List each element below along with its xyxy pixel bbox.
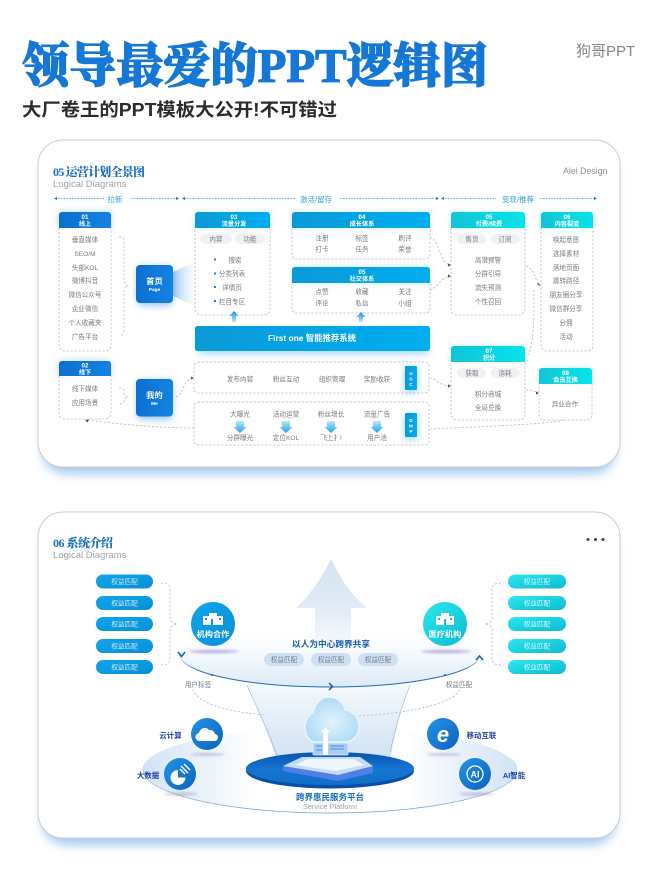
card 06 content: 选择素材 xyxy=(553,249,580,258)
panel heading xyxy=(53,164,145,190)
upper orbit ellipse xyxy=(178,623,483,690)
DMP row: 飞上扌! xyxy=(320,433,342,442)
medical circle xyxy=(421,602,471,653)
stage arrows row: 激活/留存 xyxy=(300,194,333,204)
panel heading: Logical Diagrams xyxy=(53,179,127,190)
card 01 online: 头部KOL xyxy=(72,263,99,272)
card 05 social: 05 xyxy=(359,269,366,276)
DMP row: 大曝光 xyxy=(230,410,250,418)
DMP row xyxy=(194,402,429,445)
connector beams xyxy=(173,262,195,306)
card 05 social: 关注 xyxy=(398,287,412,296)
card 07 points: 积分商城 xyxy=(475,390,502,398)
card 05 social: 评论 xyxy=(315,298,329,308)
stage arrows row: 拉新 xyxy=(108,194,123,204)
more dots xyxy=(586,538,604,541)
card 01 online: 01 xyxy=(82,214,89,221)
shared pills: 权益匹配 xyxy=(318,655,345,664)
arrow up into card 04 xyxy=(356,312,366,322)
right pill list: 权益匹配 xyxy=(524,620,551,628)
node: cloud computing xyxy=(159,718,225,756)
institution circle xyxy=(189,602,239,653)
UGC row: C xyxy=(409,382,413,387)
node: big data: 大数据 xyxy=(137,771,160,780)
DMP row: D xyxy=(409,418,413,423)
DMP row: M xyxy=(409,424,413,428)
shared pills: 权益匹配 xyxy=(271,655,298,664)
node: AI xyxy=(459,758,526,795)
DMP row: 分群曝光 xyxy=(227,433,254,442)
icon: cloud xyxy=(305,697,359,742)
card 05 social: 收藏 xyxy=(355,287,369,296)
node: cloud computing: 云计算 xyxy=(159,731,182,740)
platform label: 跨界惠民服务平台 xyxy=(296,792,364,802)
institution circle: 机构合作 xyxy=(197,629,229,639)
card 08 member: 会员互换 xyxy=(553,376,579,384)
card 01 online: SEO/M xyxy=(74,251,96,258)
panel: system introduction xyxy=(38,512,620,845)
left bracket xyxy=(161,583,177,665)
node: me: 我的 xyxy=(146,390,163,400)
card 06 content: 落地页面 xyxy=(553,263,580,272)
UGC row: U xyxy=(409,371,413,376)
node: mobile internet: 移动互联 xyxy=(467,731,497,740)
card 07 points: 消耗 xyxy=(498,368,512,378)
card paid renewal: 付费/续费 xyxy=(476,220,502,228)
card 01 online: 个人收藏夹 xyxy=(69,318,102,327)
right pill list: 权益匹配 xyxy=(524,642,551,650)
stage arrows row: 变现/推荐 xyxy=(502,194,535,204)
node: AI: AI智能 xyxy=(503,771,526,780)
card 07 points: 积分 xyxy=(483,354,496,362)
card 05 social: 私信 xyxy=(355,298,369,308)
panel heading: 06 系统介绍 xyxy=(53,535,113,550)
card 03 traffic: 搜索 xyxy=(228,256,242,264)
card 06 content: 分佣 xyxy=(559,318,573,327)
card 01 online: 广告平台 xyxy=(72,332,99,341)
card 07 points: 07 xyxy=(486,348,493,355)
card 03 traffic xyxy=(195,212,270,315)
panel heading: Logical Diagrams xyxy=(53,550,127,561)
panel: operations plan xyxy=(38,140,620,474)
DMP row: P xyxy=(409,429,413,434)
card 08 member: 异业合作 xyxy=(552,400,579,408)
side labels xyxy=(185,680,473,689)
left pill list xyxy=(96,574,153,674)
title: 领导最爱的PPT逻辑图 xyxy=(22,40,488,93)
icon: hospital xyxy=(436,613,454,625)
UGC row xyxy=(194,362,429,393)
card paid renewal: 个性召回 xyxy=(475,297,502,306)
card 07 points: 获取 xyxy=(465,368,479,378)
card 01 online: 微博抖音 xyxy=(72,276,99,285)
node: home page: 首页 xyxy=(146,276,163,286)
node: mobile internet: e xyxy=(437,722,449,747)
big upward arrow xyxy=(296,559,367,670)
funnel xyxy=(247,680,410,760)
card 05 social: 点赞 xyxy=(315,287,329,296)
stage arrows row xyxy=(54,194,597,204)
icon: upload arrow xyxy=(320,727,330,755)
author tag: 狗哥PPT xyxy=(576,43,635,60)
card 02 offline: 02 xyxy=(82,362,89,370)
platform label xyxy=(296,792,364,811)
card 06 content: 06 xyxy=(564,214,571,221)
brackets and connectors xyxy=(85,237,566,429)
card 06 content: 跳转路径 xyxy=(553,276,580,285)
left pill list: 权益匹配 xyxy=(111,598,138,608)
arrow up into card 03 xyxy=(230,311,238,322)
platform block and server xyxy=(283,743,373,781)
right pill list xyxy=(508,574,566,674)
medical circle: 医疗机构 xyxy=(429,629,461,639)
side labels: 用户标签 xyxy=(185,680,212,689)
recommendation system bar: First one 智能推荐系统 xyxy=(268,333,357,343)
card 02 offline: 线下媒体 xyxy=(72,384,99,393)
card 01 online: 垂直媒体 xyxy=(72,235,99,244)
card 05 social: 小组 xyxy=(398,298,412,308)
card 04 growth: 刷评 xyxy=(398,234,412,242)
card 03 traffic: 内容 xyxy=(209,234,223,244)
card 07 points: 全局兑换 xyxy=(475,403,502,412)
card 03 traffic: 流量分发 xyxy=(222,220,247,228)
card 06 content: 微信群分享 xyxy=(550,304,583,313)
card 03 traffic: 详情页 xyxy=(222,283,242,292)
card 08 member xyxy=(539,368,592,420)
side labels: 权益匹配 xyxy=(446,680,473,689)
card 06 content: 朋友圈分享 xyxy=(550,290,583,299)
card 04 growth: 注册 xyxy=(315,234,329,242)
right pill list: 权益匹配 xyxy=(524,577,551,586)
shared heading: 以人为中心跨界共享 xyxy=(292,638,370,649)
card 06 content xyxy=(541,212,593,351)
platform base xyxy=(246,752,414,788)
card 01 online: 微信公众号 xyxy=(69,290,102,299)
DMP row: 定位KOL xyxy=(273,433,300,442)
shared pills xyxy=(264,653,398,666)
card 03 traffic: 功能 xyxy=(243,234,257,244)
card 05 social: 社交体系 xyxy=(350,275,374,283)
UGC row: 奖励收获 xyxy=(364,374,391,384)
node: me: Me xyxy=(151,401,158,407)
card 04 growth xyxy=(292,212,430,259)
panel heading: 05 运营计划全景图 xyxy=(53,164,145,179)
brand note: Alei Design xyxy=(563,166,608,176)
left pill list: 权益匹配 xyxy=(111,620,138,628)
node: home page xyxy=(136,265,173,305)
card paid renewal: 05 xyxy=(486,214,493,221)
node: mobile internet xyxy=(427,718,497,756)
card 03 traffic: 分类列表 xyxy=(219,269,246,278)
card paid renewal: 流失预测 xyxy=(475,283,502,292)
card 04 growth: 04 xyxy=(359,214,366,221)
card paid renewal: 高潜预警 xyxy=(475,256,502,264)
UGC row: 粉丝互动 xyxy=(273,374,300,384)
right pill list: 权益匹配 xyxy=(524,598,551,608)
card 07 points xyxy=(451,346,525,420)
dashed lower arc xyxy=(193,689,460,716)
card 02 offline xyxy=(59,361,111,419)
funnel edges xyxy=(247,685,410,755)
card 01 online: 企业微信 xyxy=(72,304,99,313)
DMP row: 流量广告 xyxy=(364,410,391,418)
card 04 growth: 打卡 xyxy=(315,244,329,254)
lower orbit ellipse xyxy=(143,727,517,813)
right pill list: 权益匹配 xyxy=(524,662,551,672)
card paid renewal: 订阅 xyxy=(498,236,512,244)
UGC row: 组织管理 xyxy=(319,374,346,384)
card 04 growth: 荣誉 xyxy=(398,244,412,254)
card 01 online: 线上 xyxy=(79,220,91,228)
card 02 offline: 应用场景 xyxy=(72,398,99,407)
card 04 growth: 成长体系 xyxy=(350,220,374,228)
card 06 content: 内容裂变 xyxy=(555,220,579,228)
platform label: Service Platform xyxy=(303,802,357,811)
node: home page: Page xyxy=(149,287,161,293)
card 06 content: 唤起意愿 xyxy=(553,235,580,244)
card 03 traffic: 栏目专区 xyxy=(219,297,246,306)
card paid renewal: 分群引导 xyxy=(475,269,502,278)
DMP row: 粉丝增长 xyxy=(318,410,345,418)
right bracket xyxy=(485,583,501,665)
left pill list: 权益匹配 xyxy=(111,642,138,650)
recommendation system bar xyxy=(195,326,430,354)
card 06 content: 活动 xyxy=(559,332,573,341)
card 02 offline: 线下 xyxy=(79,368,91,376)
panel heading xyxy=(53,535,127,561)
subtitle: 大厂卷王的PPT模板大公开!不可错过 xyxy=(22,100,337,120)
card paid renewal: 售货 xyxy=(465,234,479,244)
UGC row: G xyxy=(409,376,413,382)
card 01 online xyxy=(59,212,111,351)
card 08 member: 08 xyxy=(562,370,569,377)
UGC row: 发布内容 xyxy=(227,374,254,384)
card paid renewal xyxy=(451,212,525,315)
card 05 social xyxy=(292,267,430,313)
node: big data xyxy=(137,758,198,795)
left pill list: 权益匹配 xyxy=(111,577,138,586)
card 03 traffic: 03 xyxy=(231,214,238,221)
DMP row: 用户池 xyxy=(367,433,387,442)
left pill list: 权益匹配 xyxy=(111,662,138,672)
shared pills: 权益匹配 xyxy=(365,655,392,664)
node: me xyxy=(136,379,173,419)
icon: building xyxy=(203,613,223,625)
DMP row: 活动运营 xyxy=(273,410,300,418)
card 04 growth: 标签 xyxy=(355,234,369,242)
node: AI: AI xyxy=(470,770,480,780)
card 04 growth: 任务 xyxy=(355,244,369,254)
